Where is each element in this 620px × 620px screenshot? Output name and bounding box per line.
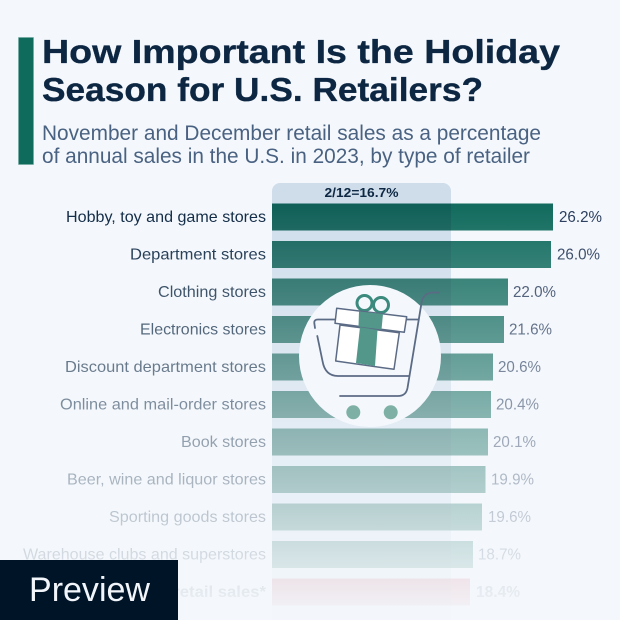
value labels: 19.9% [491,472,534,488]
bar chart [23,183,602,620]
value labels: 18.4% [476,584,520,601]
category labels: Discount department stores [65,359,266,376]
category labels: Total retail sales* [130,584,267,601]
category labels: Electronics stores [140,322,266,338]
category labels: Department stores [130,246,266,264]
value labels: 20.6% [498,359,541,376]
value labels: 18.7% [478,546,521,564]
preview badge [0,560,178,620]
category labels: Clothing stores [158,284,266,301]
title: How Important Is the Holiday [42,33,561,70]
value labels: 19.6% [488,509,531,526]
title [42,33,561,108]
category labels: Hobby, toy and game stores [66,209,266,226]
category labels: Online and mail-order stores [60,396,266,414]
bars [272,204,553,606]
title: Season for U.S. Retailers? [42,71,483,108]
value labels: 21.6% [509,322,552,338]
value labels: 22.0% [513,284,556,301]
reference band 2/12 [272,183,451,620]
subtitle: of annual sales in the U.S. in 2023, by type of retailer [42,145,530,168]
value labels: 26.0% [557,246,600,264]
category labels [23,209,267,601]
category labels: Sporting goods stores [109,509,266,526]
value labels [476,209,602,601]
value labels: 20.1% [493,434,536,451]
preview badge: Preview [29,571,150,609]
category labels: Book stores [181,434,266,451]
category labels: Warehouse clubs and superstores [23,546,266,564]
band label: 2/12=16.7% [324,186,398,200]
subtitle: November and December retail sales as a percentage [42,122,541,145]
value labels: 20.4% [496,396,539,414]
icon: shopping cart with gift [299,285,441,427]
subtitle [42,122,541,168]
category labels: Beer, wine and liquor stores [67,472,266,488]
accent bar [18,38,34,164]
value labels: 26.2% [559,209,602,226]
